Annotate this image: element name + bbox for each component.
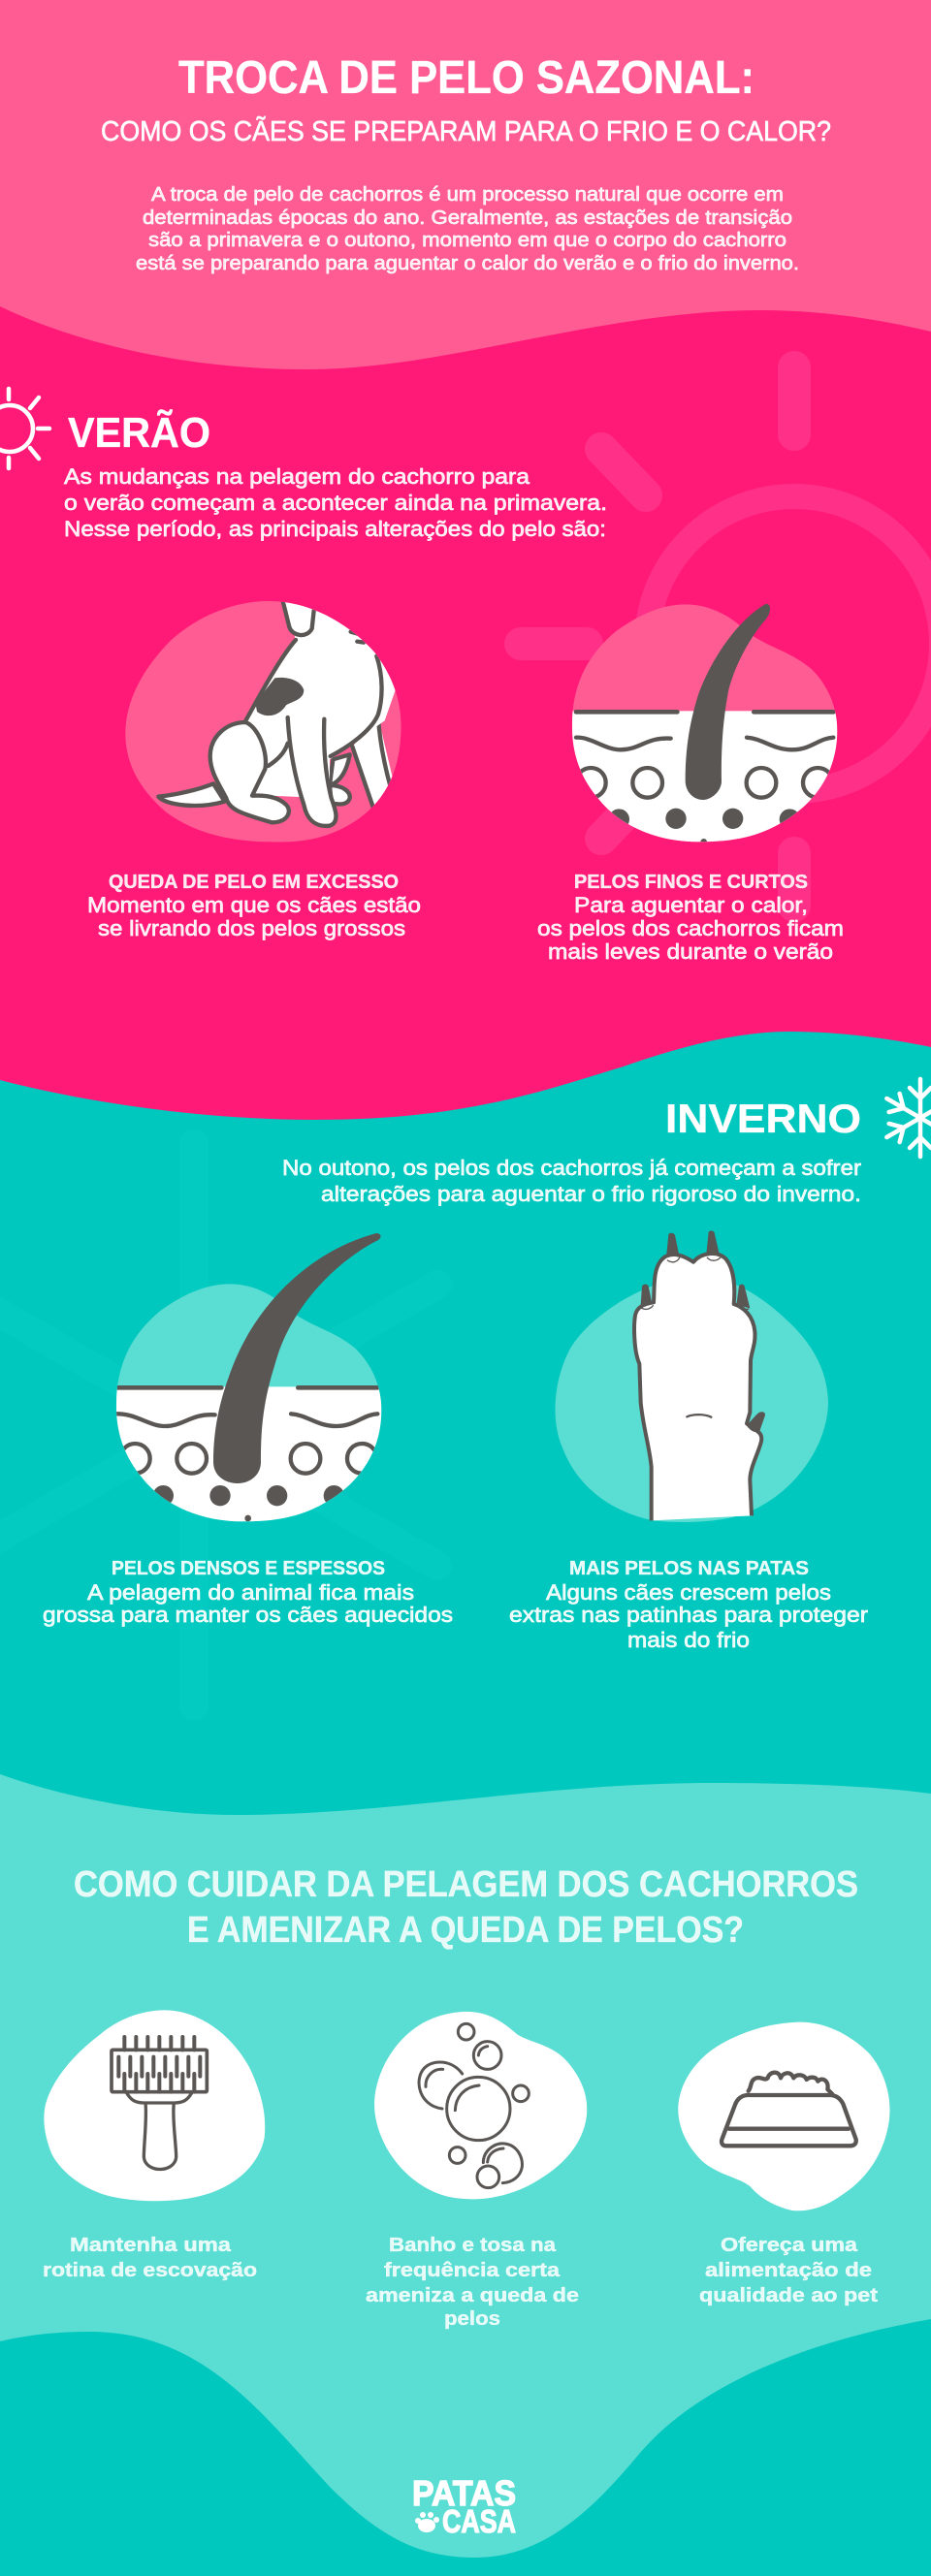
caption: queda de pelo: Momento em que os cães estão xyxy=(87,893,421,917)
decorative big sun xyxy=(521,367,931,906)
caption: queda de pelo: QUEDA DE PELO EM EXCESSO xyxy=(109,872,399,893)
caption: pelos finos: PELOS FINOS E CURTOS xyxy=(574,872,808,893)
heading: care tips: COMO CUIDAR DA PELAGEM DOS CACHORROS xyxy=(74,1864,858,1905)
summer intro text: Nesse período, as principais alterações do pelo são: xyxy=(64,517,606,541)
logo: patas em casa xyxy=(412,2473,516,2539)
icon: brush xyxy=(44,2010,265,2201)
caption: banho e tosa: frequência certa xyxy=(384,2260,561,2281)
caption: alimentação: qualidade ao pet xyxy=(699,2285,878,2306)
icon: bubbles xyxy=(374,2012,587,2199)
subtitle: COMO OS CÃES SE PREPARAM PARA O FRIO E O CALOR? xyxy=(101,114,831,147)
winter intro text xyxy=(282,1156,861,1206)
intro text: está se preparando para aguentar o calor do verão e o frio do inverno. xyxy=(136,253,799,274)
caption: mais pelos nas patas: extras nas patinhas para proteger xyxy=(509,1603,868,1627)
illustration: shedding dog xyxy=(125,598,407,843)
heading: inverno: INVERNO xyxy=(665,1096,861,1141)
caption: pelos finos xyxy=(537,872,844,964)
icon: snowflake xyxy=(882,1079,931,1157)
caption: queda de pelo xyxy=(87,872,421,940)
caption: pelos densos xyxy=(43,1558,453,1627)
summer intro text xyxy=(64,464,607,541)
background: care wave xyxy=(0,1774,931,2576)
caption: pelos finos: mais leves durante o verão xyxy=(548,939,833,964)
caption: alimentação xyxy=(699,2235,878,2306)
background: summer wave xyxy=(0,306,931,1163)
intro text: determinadas épocas do ano. Geralmente, as estações de transição xyxy=(143,207,792,229)
intro text: A troca de pelo de cachorros é um processo natural que ocorre em xyxy=(151,184,784,206)
caption: mais pelos nas patas: Alguns cães crescem pelos xyxy=(546,1580,831,1605)
winter intro text: No outono, os pelos dos cachorros já começam a sofrer xyxy=(282,1156,861,1180)
decorative big snowflake xyxy=(0,1144,437,1706)
intro text xyxy=(136,184,799,274)
caption: mais pelos nas patas: mais do frio xyxy=(627,1628,750,1652)
caption: pelos densos: PELOS DENSOS E ESPESSOS xyxy=(112,1558,385,1579)
summer intro text: o verão começam a acontecer ainda na primavera. xyxy=(64,491,607,515)
logo: patas em casa: CASA xyxy=(442,2503,516,2539)
icon: sun xyxy=(0,389,49,468)
illustration: thin hair xyxy=(572,603,838,842)
icon: food bowl xyxy=(678,2022,889,2210)
caption: pelos densos: grossa para manter os cães aquecidos xyxy=(43,1603,453,1627)
caption: alimentação: Ofereça uma xyxy=(721,2235,858,2256)
caption: pelos finos: os pelos dos cachorros ficam xyxy=(537,916,844,940)
heading: verão: VERÃO xyxy=(68,408,210,457)
background: winter wave xyxy=(0,1032,931,1842)
intro text: são a primavera e o outono, momento em que o corpo do cachorro xyxy=(148,230,787,251)
caption: alimentação: alimentação de xyxy=(705,2260,872,2281)
caption: mais pelos nas patas: MAIS PELOS NAS PATAS xyxy=(569,1558,809,1579)
caption: pelos finos: Para aguentar o calor, xyxy=(574,893,808,917)
illustration: dog paw xyxy=(555,1230,828,1522)
background: footer wave xyxy=(0,2319,931,2576)
summer intro text: As mudanças na pelagem do cachorro para xyxy=(64,464,530,489)
heading: care tips xyxy=(74,1864,858,1951)
illustration: thick hair xyxy=(116,1233,382,1522)
caption: mais pelos nas patas xyxy=(509,1558,868,1652)
title: TROCA DE PELO SAZONAL: xyxy=(178,52,754,104)
caption: pelos densos: A pelagem do animal fica mais xyxy=(87,1580,414,1605)
caption: escovação xyxy=(43,2235,257,2281)
caption: banho e tosa: Banho e tosa na xyxy=(389,2235,557,2256)
caption: banho e tosa: pelos xyxy=(444,2308,500,2330)
caption: escovação: rotina de escovação xyxy=(43,2260,257,2281)
caption: banho e tosa xyxy=(366,2235,579,2330)
heading: care tips: E AMENIZAR A QUEDA DE PELOS? xyxy=(187,1910,744,1951)
caption: banho e tosa: ameniza a queda de xyxy=(366,2285,579,2306)
caption: queda de pelo: se livrando dos pelos grossos xyxy=(98,916,405,940)
winter intro text: alterações para aguentar o frio rigoroso do inverno. xyxy=(321,1182,861,1206)
logo: patas em casa: PATAS xyxy=(412,2473,516,2513)
caption: escovação: Mantenha uma xyxy=(70,2235,232,2256)
